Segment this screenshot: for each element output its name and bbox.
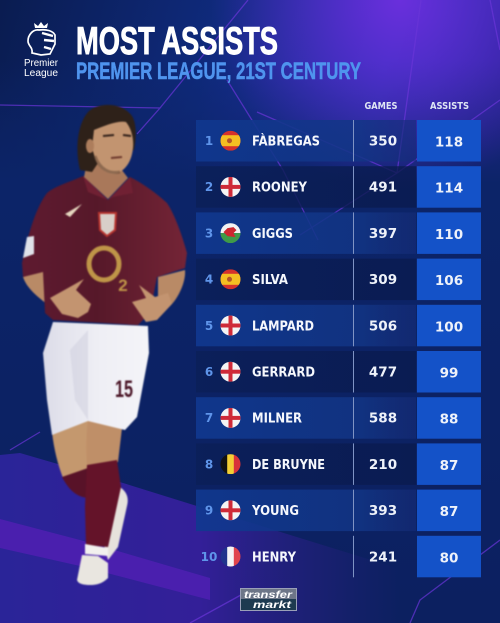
row 7 Milner: 588 — [369, 411, 397, 427]
row 3 Giggs — [196, 212, 481, 254]
row 8 De Bruyne: DE BRUYNE — [252, 457, 325, 473]
row 9 Young: 393 — [369, 503, 397, 519]
shirt — [22, 176, 187, 325]
sponsor O2 — [89, 248, 128, 295]
row 8 De Bruyne: 87 — [440, 458, 458, 474]
face — [92, 122, 133, 174]
icon: lion crown — [28, 22, 55, 55]
row 9 Young: 9 — [205, 504, 213, 518]
row 6 Gerrard — [196, 351, 481, 392]
row 3 Giggs: GIGGS — [252, 226, 293, 242]
back leg — [52, 420, 90, 478]
row 8 De Bruyne: 8 — [205, 457, 213, 471]
row 2 Rooney: 2 — [205, 180, 213, 194]
row 3 Giggs: 3 — [205, 226, 213, 240]
row 10 Henry: 80 — [440, 550, 458, 566]
row 10 Henry: HENRY — [252, 549, 296, 565]
row 7 Milner: 7 — [205, 411, 213, 425]
subtitle: PREMIER LEAGUE, 21ST CENTURY — [76, 58, 361, 85]
logo: Premier League — [24, 22, 59, 79]
right arm — [158, 270, 185, 304]
hair back — [77, 105, 136, 172]
column header: games: GAMES — [364, 101, 398, 112]
row 2 Rooney: ROONEY — [252, 180, 307, 196]
row 9 Young: 87 — [440, 504, 458, 520]
row 10 Henry — [201, 536, 481, 577]
row 5 Lampard: 5 — [205, 319, 213, 333]
row 8 De Bruyne — [196, 443, 481, 485]
sponsor O2: 2 — [118, 276, 128, 295]
row 6 Gerrard: GERRARD — [252, 364, 315, 380]
table — [196, 120, 481, 577]
shorts — [43, 322, 149, 435]
row 7 Milner — [196, 397, 481, 439]
row 2 Rooney: 491 — [369, 180, 397, 196]
row 10 Henry: 10 — [201, 550, 217, 564]
row 1 Fàbregas: FÀBREGAS — [252, 132, 320, 150]
row 9 Young: YOUNG — [251, 503, 299, 519]
row 6 Gerrard: 99 — [440, 366, 458, 382]
row 1 Fàbregas — [196, 120, 481, 162]
shorts fold — [70, 330, 88, 420]
row 8 De Bruyne: 210 — [369, 457, 397, 473]
row 5 Lampard: 100 — [435, 319, 463, 335]
row 1 Fàbregas: 1 — [205, 134, 213, 148]
collar — [83, 176, 133, 200]
player photo — [22, 105, 187, 585]
facial features — [103, 135, 131, 136]
logo: transfermarkt — [240, 588, 296, 611]
front sock — [85, 460, 121, 547]
back sock — [62, 468, 88, 498]
row 7 Milner: 88 — [440, 412, 458, 428]
front leg — [86, 420, 122, 468]
back shoe — [104, 487, 128, 560]
left arm — [23, 270, 70, 314]
row 4 Silva: SILVA — [252, 272, 288, 288]
row 5 Lampard: LAMPARD — [252, 318, 314, 334]
front shoe — [77, 555, 108, 585]
hands — [50, 279, 172, 322]
row 9 Young — [196, 490, 481, 531]
neck — [84, 162, 128, 199]
logo: transfermarkt: markt — [253, 600, 292, 611]
ankle tape — [85, 544, 108, 556]
wordmark: Premier — [24, 58, 59, 69]
logo: transfermarkt: transfer — [244, 590, 293, 601]
ear — [86, 139, 94, 153]
row 10 Henry: 241 — [369, 549, 397, 565]
column header: assists: ASSISTS — [430, 101, 469, 112]
row 6 Gerrard: 477 — [369, 364, 397, 380]
row 5 Lampard — [196, 305, 481, 346]
row 1 Fàbregas: 350 — [369, 134, 397, 150]
shorts number: 15 — [115, 376, 133, 403]
row 4 Silva — [196, 259, 481, 300]
sleeve patch — [23, 236, 34, 258]
row 7 Milner: MILNER — [252, 411, 303, 427]
row 2 Rooney — [196, 166, 481, 208]
row 4 Silva: 4 — [205, 273, 213, 287]
row 5 Lampard: 506 — [369, 318, 397, 334]
title: MOST ASSISTS — [76, 20, 278, 63]
row 4 Silva: 309 — [369, 272, 397, 288]
crest — [99, 213, 116, 236]
row 4 Silva: 106 — [435, 273, 463, 289]
row 2 Rooney: 114 — [435, 181, 463, 197]
row 6 Gerrard: 6 — [205, 365, 213, 379]
row 3 Giggs: 397 — [369, 226, 397, 242]
logo: Premier League: League — [24, 68, 58, 79]
row 1 Fàbregas: 118 — [435, 134, 463, 150]
swoosh — [65, 204, 82, 217]
row 3 Giggs: 110 — [435, 227, 463, 243]
